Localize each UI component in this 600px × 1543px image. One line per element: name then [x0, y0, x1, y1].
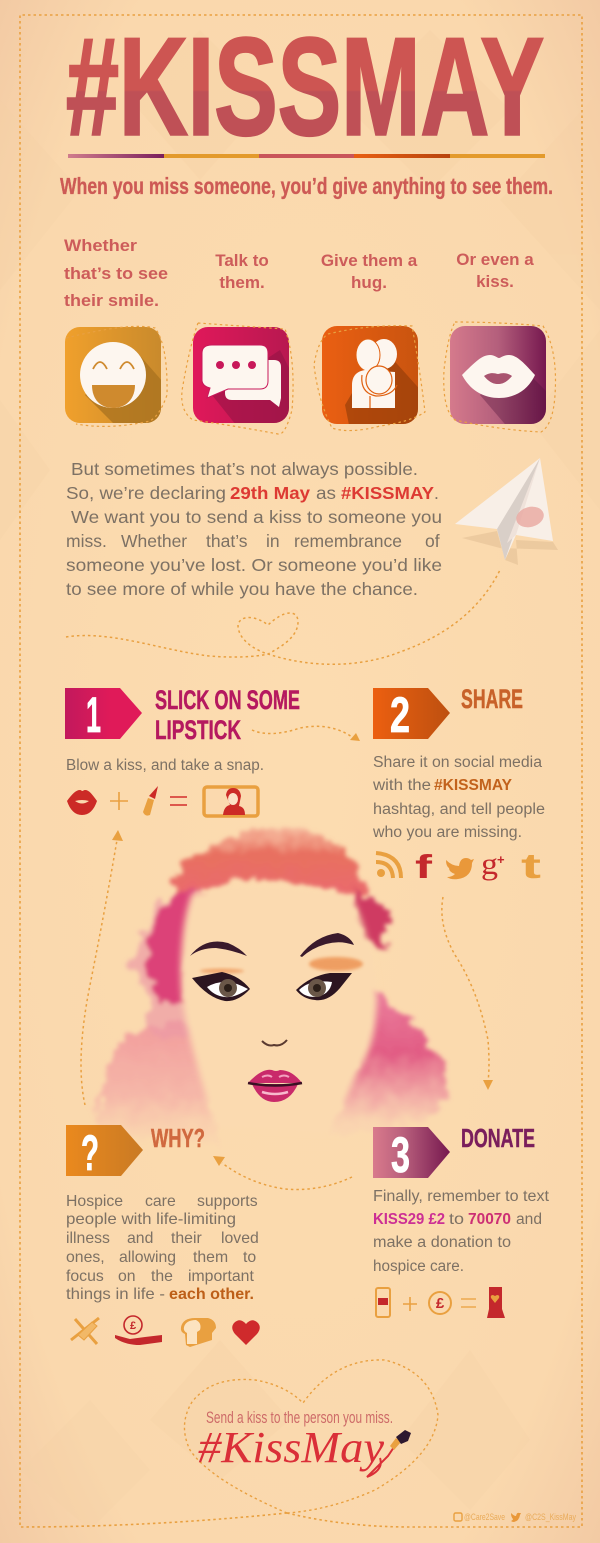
lips [248, 1070, 302, 1102]
step 3 [373, 1123, 550, 1318]
intro paragraph: as [316, 483, 336, 503]
step 1 heading [155, 685, 300, 745]
step 3 badge: 3 [391, 1127, 410, 1183]
step 2 [372, 684, 545, 886]
arrow: step 1 to step 2 [252, 726, 360, 741]
step 3 text: to [449, 1211, 464, 1228]
step 1 heading: LIPSTICK [155, 715, 241, 745]
why text: focus [66, 1268, 104, 1285]
why text: each other. [169, 1286, 254, 1303]
step 2 text: with the [372, 777, 431, 794]
social icons: f [415, 848, 434, 885]
icon: smile [65, 326, 170, 430]
intro paragraph: #KISSMAY [341, 483, 434, 503]
step 3 text: hospice care. [373, 1258, 464, 1275]
intro paragraph: to see more of while you have the chance. [66, 579, 418, 599]
why text: supports [197, 1193, 258, 1210]
caption: smile: their smile. [64, 291, 159, 310]
arrow: step 2 to step 3 [442, 897, 493, 1090]
why text [66, 1193, 259, 1303]
step 3 badge [373, 1127, 450, 1183]
caption: kiss [456, 250, 534, 291]
intro paragraph: We want you to send a kiss to someone you [71, 507, 442, 527]
flight path with heart [66, 570, 500, 664]
intro paragraph: But sometimes that’s not always possible. [71, 459, 418, 479]
closing tagline: Send a kiss to the person you miss. [206, 1408, 393, 1427]
step 2 text: #KISSMAY [434, 777, 513, 794]
nose [262, 1040, 287, 1046]
caption: talk [215, 251, 269, 292]
arrow: why to step 1 [81, 830, 123, 1105]
step 3 text [373, 1188, 550, 1275]
step 2 text: hashtag, and tell people [373, 801, 545, 818]
social icons: t [521, 847, 542, 886]
why text: to [243, 1249, 256, 1266]
why text: on [118, 1268, 136, 1285]
why section [66, 1123, 260, 1347]
step 1 [65, 685, 300, 816]
why icons [71, 1316, 260, 1347]
icon: speech bubbles [182, 323, 295, 434]
footer social handles: @Care2Save [464, 1512, 505, 1523]
step 3 equation icons: £ [436, 1295, 445, 1312]
step 1 badge: 1 [86, 687, 101, 743]
why text: them [193, 1249, 228, 1266]
social icons: g [481, 846, 498, 881]
social icons [376, 846, 542, 886]
intro paragraph: So, we’re declaring [66, 483, 226, 503]
icon: lips [444, 322, 556, 432]
caption: talk: them. [219, 273, 265, 292]
right eye [296, 973, 352, 1000]
icon: paper plane [455, 458, 558, 565]
closing heart outline [184, 1360, 438, 1513]
script hashtag logo: #KissMay [198, 1423, 384, 1472]
caption: smile: that’s to see [64, 264, 168, 283]
why text: people with life-limiting [66, 1211, 236, 1228]
why heading: WHY? [151, 1123, 205, 1153]
left eye [192, 972, 250, 1001]
step 2 text: Share it on social media [373, 754, 542, 771]
intro paragraph: 29th May [230, 483, 310, 503]
icon: hug [314, 326, 425, 431]
step 1 badge [65, 687, 142, 743]
step 1 heading: SLICK ON SOME [155, 685, 300, 715]
step 3 text: 70070 [468, 1211, 511, 1228]
why text: loved [221, 1230, 259, 1247]
intro paragraph: . [434, 483, 439, 503]
step 3 text: make a donation to [373, 1234, 511, 1251]
eyebrows [190, 942, 247, 956]
why text: things in life - [66, 1286, 165, 1303]
hair [98, 827, 450, 1145]
why text: ones, [66, 1249, 105, 1266]
icon: lipstick [390, 1430, 411, 1450]
intro paragraph: remembrance [294, 531, 402, 551]
step 2 text [372, 754, 545, 841]
intro paragraph: that’s [206, 531, 248, 551]
why text: their [171, 1230, 202, 1247]
step 2 text: who you are missing. [372, 824, 522, 841]
step 1 text: Blow a kiss, and take a snap. [66, 757, 264, 774]
why icons: £ [130, 1320, 136, 1332]
step 2 badge: 2 [390, 687, 410, 743]
why text: allowing [119, 1249, 176, 1266]
footer social handles [454, 1512, 576, 1523]
watercolour portrait [98, 827, 450, 1145]
step 3 text: Finally, remember to text [373, 1188, 550, 1205]
caption: talk: Talk to [215, 251, 269, 270]
why text: and [127, 1230, 153, 1247]
face [181, 888, 377, 1132]
caption: smile: Whether [64, 236, 137, 255]
why badge [66, 1125, 143, 1181]
intro paragraph [66, 459, 442, 599]
why text: the [151, 1268, 173, 1285]
eye makeup [309, 957, 363, 971]
step 2 heading: SHARE [461, 684, 523, 714]
caption: smile [64, 236, 168, 310]
arrow: step 3 to why [213, 1156, 352, 1190]
footer social handles: @C2S_KissMay [525, 1512, 576, 1523]
title divider bar [68, 154, 545, 158]
step 3 heading: DONATE [461, 1123, 535, 1153]
social icons: + [497, 852, 505, 867]
caption: hug: Give them a [321, 251, 418, 270]
intro paragraph: someone you’ve lost. Or someone you’d like [66, 555, 442, 575]
why text: important [188, 1268, 254, 1285]
step 3 text: and [516, 1211, 542, 1228]
why text: illness [66, 1230, 110, 1247]
caption: kiss: Or even a [456, 250, 534, 269]
intro paragraph: in [266, 531, 280, 551]
why badge: ? [81, 1125, 99, 1181]
step 2 badge [373, 687, 450, 743]
why text: care [145, 1193, 176, 1210]
intro paragraph: Whether [121, 531, 187, 551]
step 1 equation icons [67, 786, 258, 816]
step 3 equation icons [376, 1287, 505, 1318]
step 3 text: KISS29 £2 [373, 1211, 445, 1228]
caption: kiss: kiss. [476, 272, 514, 291]
why text: Hospice [66, 1193, 123, 1210]
caption: hug [321, 251, 418, 292]
caption: hug: hug. [351, 273, 387, 292]
intro paragraph: of [425, 531, 440, 551]
intro paragraph: miss. [66, 531, 107, 551]
